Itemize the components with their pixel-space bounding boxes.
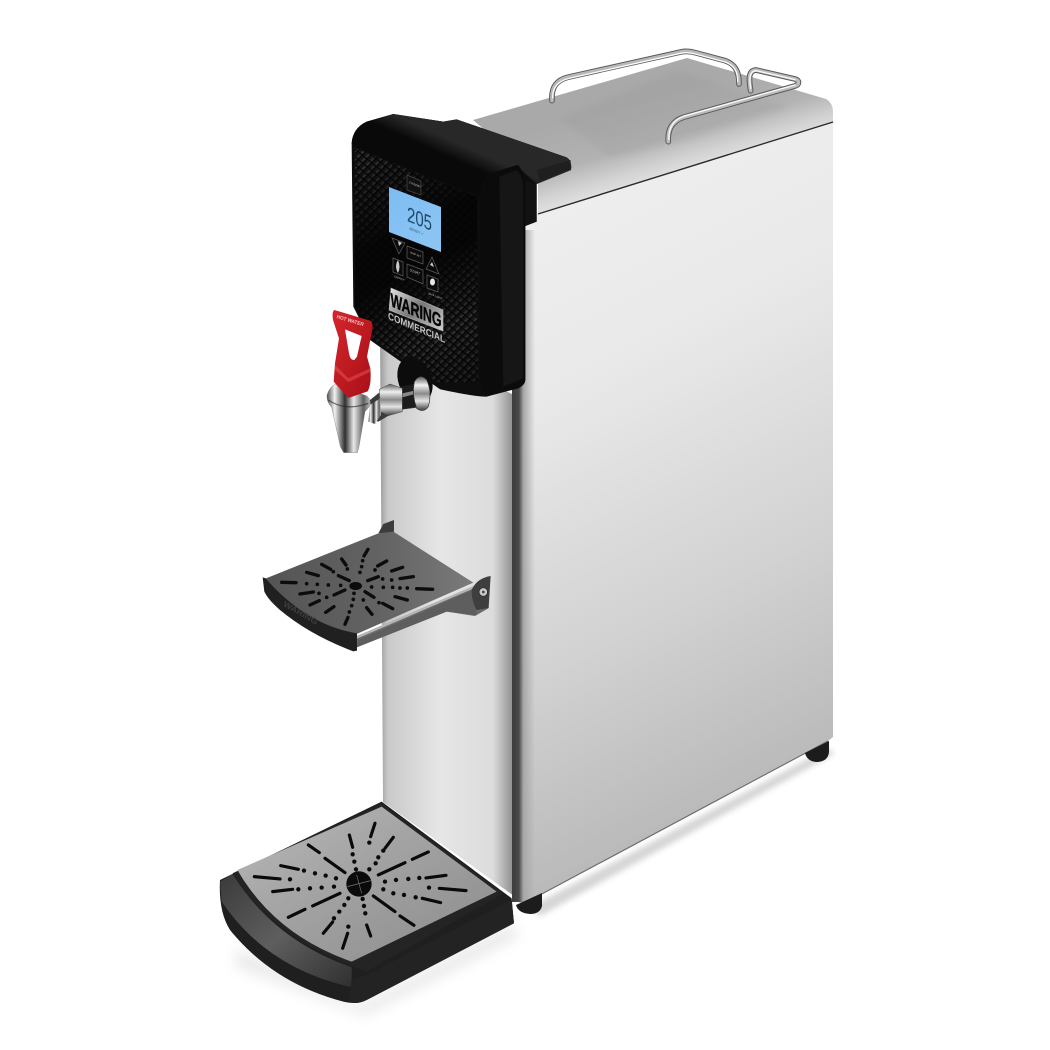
cup shelf: WARING (282, 600, 319, 627)
start button (407, 264, 423, 284)
narrow front column of the body (380, 330, 514, 896)
diamond texture (355, 148, 478, 383)
tray base (220, 802, 514, 1003)
red lever handle (333, 310, 373, 398)
control head housing (352, 114, 571, 397)
down button (392, 238, 405, 254)
mounting screw (472, 576, 491, 610)
carrying handles (552, 51, 798, 142)
tap mounting boss (391, 352, 439, 408)
tray front lip (220, 874, 352, 987)
spout neck (368, 398, 381, 424)
keypad labels: TEMP SET (409, 251, 422, 259)
shelf back tab (378, 520, 394, 533)
tray drain holes (288, 840, 431, 929)
keypad (392, 238, 439, 292)
LCD display: READY ✓ (409, 227, 424, 236)
product illustration: hot water dispenser (220, 48, 834, 1015)
light button (427, 275, 438, 292)
keypad labels: ENERGY (394, 275, 405, 282)
LCD display (389, 187, 441, 252)
shelf drain holes (305, 559, 409, 614)
tray metal plate (237, 807, 497, 962)
LCD display: 205 (407, 202, 432, 236)
drip tray (220, 802, 514, 1003)
tap pipe (370, 383, 425, 422)
red lever handle: HOT WATER (336, 314, 365, 328)
keypad labels: BACK LIGHT (428, 292, 443, 301)
Waring Commercial logo: WARING (390, 290, 442, 332)
shelf front lip (263, 577, 357, 651)
feet (516, 741, 829, 914)
tray drain slots (254, 823, 466, 948)
standby button (407, 175, 422, 195)
keypad labels (394, 241, 443, 301)
housing right side (481, 165, 525, 395)
front handle (668, 70, 798, 142)
Waring Commercial logo (388, 288, 445, 346)
control panel face (355, 148, 478, 383)
keypad labels: START (409, 268, 421, 276)
cup shelf (263, 520, 491, 651)
cast shadows on the floor (235, 748, 834, 1015)
up button (426, 257, 439, 274)
eco button (393, 258, 403, 276)
right side panel of the body (512, 123, 833, 903)
program button (407, 246, 423, 264)
top lid (473, 58, 833, 214)
hex nut (379, 384, 402, 416)
spout body (327, 384, 370, 453)
shelf drain slots (282, 549, 433, 624)
rear collar (518, 165, 537, 226)
shelf bracket (357, 576, 490, 647)
standby button: STANDBY (408, 180, 422, 189)
housing body (352, 114, 571, 397)
housing top surface (352, 114, 571, 197)
water tap (327, 310, 439, 453)
flange (413, 377, 430, 410)
back handle (552, 51, 739, 101)
shelf top (266, 532, 473, 634)
Waring Commercial logo: COMMERCIAL (388, 311, 445, 346)
